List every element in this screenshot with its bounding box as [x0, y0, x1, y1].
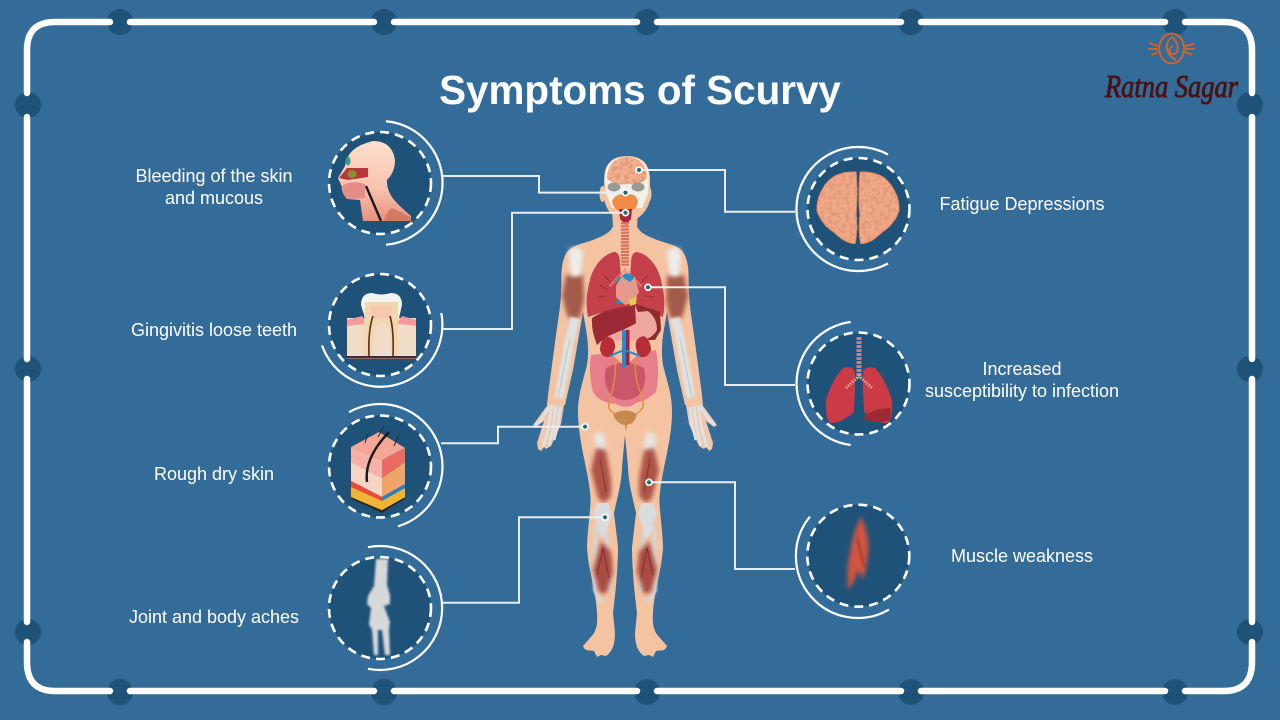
icon: conch shell — [1148, 34, 1195, 64]
icon: skin cube — [351, 426, 405, 512]
icon: tooth — [347, 293, 416, 359]
label: bleeding: Bleeding of the skin — [135, 166, 293, 186]
panel: bleeding of the skin and mucous — [329, 121, 443, 245]
panel: increased susceptibility to infection — [797, 322, 910, 445]
body silhouette — [547, 156, 703, 657]
panel: joint and body aches — [329, 546, 442, 670]
connector lines — [441, 170, 795, 603]
label: muscle weakness: Muscle weakness — [951, 546, 1093, 566]
right arm with muscle and bones — [666, 248, 717, 451]
logo wordmark: Ratna Sagar — [1104, 68, 1238, 104]
brain — [607, 157, 647, 184]
throat — [619, 209, 632, 225]
title: Symptoms of Scurvy — [439, 67, 841, 113]
stomach backing — [636, 304, 661, 340]
icon: head cross-section — [338, 141, 411, 221]
stomach — [604, 305, 657, 341]
bladder — [613, 410, 637, 432]
small intestine — [605, 363, 645, 400]
icon: brain — [817, 172, 899, 244]
logo: Ratna Sagar — [1104, 34, 1238, 104]
bronchi — [610, 270, 641, 286]
label: infection: susceptibility to infection — [925, 381, 1119, 401]
eye sockets — [608, 182, 644, 192]
icon: knee joint bones — [367, 559, 390, 655]
trachea — [621, 222, 629, 266]
lungs — [587, 252, 664, 317]
panel: rough dry skin — [329, 404, 443, 526]
icon: muscle — [847, 517, 868, 590]
label: fatigue: Fatigue Depressions — [939, 194, 1105, 214]
right leg with muscles and bones — [637, 432, 659, 603]
kidneys — [600, 336, 651, 357]
panel: fatigue depressions — [796, 147, 910, 271]
panel: gingivitis loose teeth — [322, 274, 442, 387]
ureters — [609, 357, 643, 413]
connector end dots — [581, 166, 653, 521]
label: joint and body aches: Joint and body aches — [129, 607, 299, 627]
aorta and vena cava — [610, 330, 640, 367]
label: gingivitis: Gingivitis loose teeth — [131, 320, 297, 340]
label: infection: Increased — [982, 359, 1062, 379]
panel: muscle weakness — [796, 505, 909, 618]
icon: lungs — [826, 337, 892, 423]
heart — [616, 273, 639, 306]
label: bleeding: and mucous — [165, 188, 263, 208]
left leg with muscles and bones — [591, 432, 613, 603]
human body anatomy — [533, 156, 717, 657]
palate — [612, 194, 638, 213]
intestines — [590, 350, 658, 407]
skull — [605, 157, 649, 208]
left arm with muscle and bones — [533, 248, 584, 451]
label: rough dry skin: Rough dry skin — [154, 464, 274, 484]
liver — [592, 305, 637, 345]
